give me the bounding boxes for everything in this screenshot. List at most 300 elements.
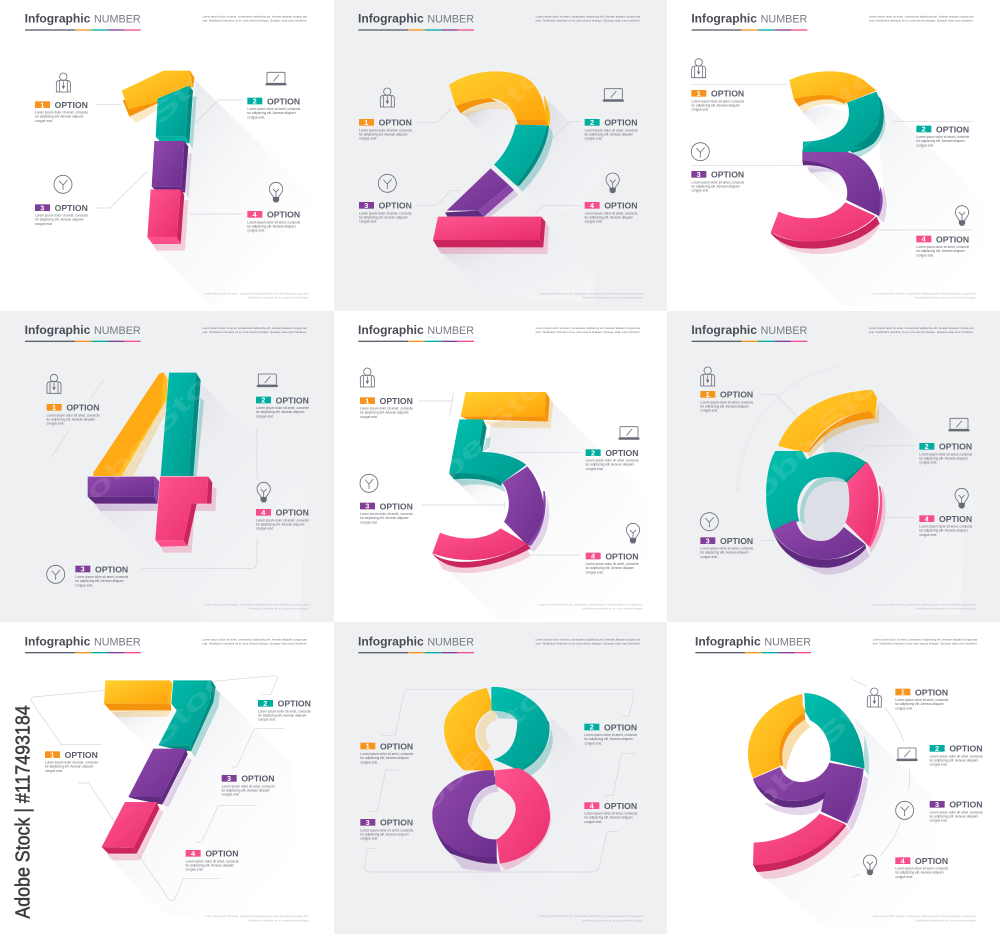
digit 3 [771, 71, 887, 254]
header description [202, 15, 307, 23]
option 4: OPTION [267, 210, 300, 220]
panel: number 1 [0, 0, 334, 311]
header: title [25, 12, 141, 31]
header: title: NUMBER [764, 636, 811, 648]
option 2: 2 [922, 125, 926, 134]
footer text [539, 291, 643, 300]
footer text [539, 602, 643, 611]
watermark: Adobe Stock [370, 22, 586, 238]
option 1: OPTION [720, 390, 753, 400]
header description: erat. Vestibulum interdum mi eu urna viverra tristique. Quisque vitae nunc hendrerit. [536, 330, 641, 334]
option 2: OPTION [605, 448, 639, 458]
option 4: Lorem ipsum dolor sit amet, consecte [186, 859, 239, 863]
option 3: tur adipiscing elit. Aenean aliquam [700, 551, 749, 555]
option 3 [700, 536, 754, 559]
option 4: tur adipiscing elit. Aenean aliquam [584, 816, 633, 820]
option 1: 1 [52, 403, 56, 412]
footer text [539, 914, 643, 922]
option 3: OPTION [95, 564, 128, 574]
option 2: tur adipiscing elit. Aenean aliquam [584, 737, 633, 741]
long shadow of 9 [760, 717, 934, 929]
option 2: Lorem ipsum dolor sit amet, consecte [919, 452, 973, 456]
option 4: congue erat. [895, 875, 913, 879]
leader lines [760, 394, 914, 540]
option 1: tur adipiscing elit. Aenean aliquam [35, 115, 84, 119]
option 1 [895, 687, 949, 710]
option 4: tur adipiscing elit. Aenean aliquam [919, 529, 968, 533]
icon: bulb [626, 523, 640, 543]
header: title: Infographic [358, 634, 424, 648]
icon: clock [700, 513, 718, 531]
option 2 [247, 96, 301, 119]
option 2: OPTION [278, 699, 311, 709]
option 1: Lorem ipsum dolor sit amet, consecte [35, 111, 88, 115]
option 4: congue erat. [584, 820, 602, 824]
header: title: NUMBER [94, 14, 141, 26]
header description: Lorem ipsum dolor sit amet, consectetur adipiscing elit. Aenean aliquam congue par [536, 326, 640, 330]
option 4: 4 [253, 210, 258, 219]
option 3 [691, 170, 745, 193]
footer text [205, 291, 309, 300]
option 4: 4 [261, 508, 266, 517]
long shadow of 1 [152, 80, 317, 308]
footer text: Lorem ipsum dolor sit amet, consectetur adipiscing elit. Aenean aliquam congue erat [539, 602, 643, 606]
option 3: tur adipiscing elit. Aenean aliquam [35, 218, 84, 222]
icon: clock [360, 474, 378, 492]
option 4: 4 [901, 856, 906, 865]
option 3: congue erat. [222, 793, 239, 797]
digit 6 [766, 390, 886, 575]
option 1: OPTION [711, 89, 744, 99]
option 1: 1 [364, 118, 368, 127]
icon: clock [54, 175, 72, 193]
option 1: tur adipiscing elit. Aenean aliquam [700, 404, 749, 408]
footer text: Lorem ipsum dolor sit amet, consectetur adipiscing elit. Aenean aliquam congue erat [205, 602, 309, 606]
option 4: 4 [590, 201, 595, 210]
icon: laptop [266, 72, 286, 85]
leader lines [419, 393, 581, 555]
option 1 [35, 100, 88, 123]
option 3: congue erat. [700, 555, 718, 559]
header description: erat. Vestibulum interdum mi eu urna viverra tristique. Quisque vitae nunc hendrerit. [869, 19, 974, 23]
option 2: 2 [253, 97, 257, 106]
option 1: congue erat. [691, 108, 709, 112]
option 3: congue erat. [691, 189, 709, 193]
option 3: OPTION [380, 818, 413, 828]
icon: bulb [269, 182, 283, 202]
stock id vertical text: Adobe Stock | #117493184 [12, 705, 35, 919]
option 1: congue erat. [45, 769, 63, 773]
header description [202, 326, 307, 334]
option 4 [919, 514, 973, 537]
option 3: 3 [366, 818, 370, 827]
option 4: congue erat. [585, 220, 602, 224]
header: title: Infographic [691, 12, 757, 26]
icon: person [692, 59, 706, 78]
option 3: Lorem ipsum dolor sit amet, consecte [700, 547, 754, 551]
option 3: OPTION [379, 201, 412, 211]
option 3: tur adipiscing elit. Aenean aliquam [75, 579, 124, 583]
option 1: tur adipiscing elit. Aenean aliquam [359, 132, 408, 136]
icon: person [867, 688, 881, 707]
panel: number 5 [334, 311, 667, 622]
option 1: OPTION [380, 741, 413, 751]
option 4: 4 [191, 849, 196, 858]
option 3: congue erat. [930, 819, 947, 823]
option 3: tur adipiscing elit. Aenean aliquam [360, 516, 409, 520]
option 2 [584, 722, 638, 745]
option 2: congue erat. [586, 467, 603, 471]
option 1: OPTION [55, 100, 88, 110]
option 4 [584, 801, 638, 824]
footer text: Vestibulum interdum mi eu urna viverra tristique [248, 918, 309, 922]
option 4: tur adipiscing elit. Aenean aliquam [585, 215, 633, 219]
header description [873, 637, 978, 645]
header: title [695, 634, 811, 653]
icon: clock [378, 174, 396, 192]
option 4: Lorem ipsum dolor sit amet, consecte [586, 562, 639, 566]
option 2: OPTION [949, 744, 983, 754]
option 2: 2 [935, 744, 939, 753]
option 2: Lorem ipsum dolor sit amet, consecte [258, 709, 311, 713]
option 4: 4 [591, 552, 596, 561]
panel: number 3 [667, 0, 1000, 311]
option 1: Lorem ipsum dolor sit amet, consecte [359, 128, 412, 132]
option 2: tur adipiscing elit. Aenean aliquam [916, 139, 965, 143]
option 3: congue erat. [360, 520, 378, 524]
option 4 [247, 210, 301, 233]
header: title: NUMBER [427, 636, 474, 648]
leader lines [51, 379, 257, 569]
option 4 [585, 201, 638, 224]
option 2: OPTION [604, 118, 638, 128]
option 1: Lorem ipsum dolor sit amet, consecte [47, 413, 100, 417]
option 2: OPTION [604, 722, 637, 732]
header: title: Infographic [358, 323, 424, 337]
header description: erat. Vestibulum interdum mi eu urna viverra tristique. Quisque vitae nunc hendrerit. [869, 330, 974, 334]
footer text: Lorem ipsum dolor sit amet, consectetur adipiscing elit. Aenean aliquam congue erat [539, 914, 643, 918]
option 1: congue erat. [895, 706, 913, 710]
option 1: Lorem ipsum dolor sit amet, consecte [700, 400, 754, 404]
option 4: tur adipiscing elit. Aenean aliquam [895, 871, 944, 875]
option 1: Lorem ipsum dolor sit amet, consecte [360, 752, 414, 756]
option 1: tur adipiscing elit. Aenean aliquam [47, 417, 95, 421]
option 1: congue erat. [35, 119, 53, 123]
option 1: Lorem ipsum dolor sit amet, consecte [691, 99, 745, 103]
option 2: OPTION [276, 395, 309, 405]
digit 5 [432, 392, 553, 573]
leader lines [31, 676, 284, 901]
long shadow of 8 [451, 717, 644, 926]
option 1: OPTION [915, 687, 948, 697]
option 3: OPTION [380, 501, 413, 511]
option 4: OPTION [936, 234, 969, 244]
option 2: tur adipiscing elit. Aenean aliquam [919, 456, 968, 460]
option 2: Lorem ipsum dolor sit amet, consecte [584, 733, 638, 737]
icon: person [56, 73, 70, 92]
header: title: Infographic [358, 12, 424, 26]
option 1 [47, 403, 100, 426]
header: title [358, 323, 474, 342]
icon: laptop [603, 89, 624, 101]
option 2: 2 [590, 723, 594, 732]
option 4 [895, 856, 949, 879]
option 2: 2 [591, 448, 595, 457]
option 1: Lorem ipsum dolor sit amet, consecte [360, 407, 413, 411]
option 4: tur adipiscing elit. Aenean aliquam [256, 522, 305, 526]
option 3: OPTION [241, 774, 275, 784]
panel: number 2 [334, 0, 667, 311]
icon: bulb [863, 855, 877, 875]
long shadow of 4 [93, 383, 307, 619]
icon: person [360, 368, 374, 387]
panel: number 4 [0, 311, 334, 622]
header: title: Infographic [25, 323, 91, 337]
footer text: Vestibulum interdum mi eu urna viverra tristique [248, 296, 309, 300]
header description: erat. Vestibulum interdum mi eu urna viverra tristique. Quisque vitae nunc hendrerit. [536, 19, 641, 23]
icon: laptop [257, 374, 278, 387]
header: title [358, 634, 474, 653]
option 2: tur adipiscing elit. Aenean aliquam [930, 758, 978, 762]
option 3: Lorem ipsum dolor sit amet, consecte [222, 784, 275, 788]
option 3: Lorem ipsum dolor sit amet, consecte [360, 828, 414, 832]
footer text: Lorem ipsum dolor sit amet, consectetur adipiscing elit. Aenean aliquam congue erat [205, 914, 309, 918]
option 3: 3 [227, 774, 231, 783]
option 3: Lorem ipsum dolor sit amet, consecte [75, 575, 129, 579]
footer text: Lorem ipsum dolor sit amet, consectetur adipiscing elit. Aenean aliquam congue erat [872, 602, 976, 606]
option 3 [359, 201, 412, 224]
option 3: congue erat. [359, 220, 377, 224]
option 3 [75, 564, 129, 587]
long shadow of 3 [779, 98, 984, 307]
footer text: Vestibulum interdum mi eu urna viverra tristique [582, 918, 643, 922]
option 1: tur adipiscing elit. Aenean aliquam [360, 411, 409, 415]
option 1: 1 [706, 390, 710, 399]
option 2: congue erat. [584, 741, 602, 745]
option 2: 2 [925, 442, 929, 451]
option 4: tur adipiscing elit. Aenean aliquam [916, 249, 965, 253]
icon: laptop [619, 427, 639, 439]
option 1 [360, 741, 414, 764]
option 2: tur adipiscing elit. Aenean aliquam [258, 713, 307, 717]
option 2: tur adipiscing elit. Aenean aliquam [247, 111, 296, 115]
watermark: Adobe Stock [703, 22, 919, 238]
option 4: OPTION [939, 514, 972, 524]
option 3: Lorem ipsum dolor sit amet, consecte [691, 180, 745, 184]
option 4 [586, 551, 639, 574]
header description: erat. Vestibulum interdum mi eu urna viverra tristique. Quisque vitae nunc hendrerit. [873, 641, 978, 645]
watermark: Adobe Stock [36, 644, 252, 860]
header description: Lorem ipsum dolor sit amet, consectetur adipiscing elit. Aenean aliquam congue par [202, 637, 307, 641]
header: title [358, 12, 474, 31]
option 2 [258, 699, 311, 722]
option 4: Lorem ipsum dolor sit amet, consecte [895, 867, 949, 871]
header description [536, 326, 641, 334]
option 4: congue erat. [256, 527, 274, 531]
option 1: OPTION [380, 396, 413, 406]
option 3: Lorem ipsum dolor sit amet, consecte [35, 214, 88, 218]
option 1: OPTION [65, 750, 98, 760]
option 1 [700, 390, 754, 413]
icon: bulb [955, 488, 968, 508]
option 3: tur adipiscing elit. Aenean aliquam [930, 814, 978, 818]
digit 2 [433, 71, 553, 254]
option 4: OPTION [276, 508, 309, 518]
option 2: 2 [261, 396, 265, 405]
option 3: congue erat. [360, 837, 378, 841]
header description: erat. Vestibulum interdum mi eu urna viverra tristique. Quisque vitae nunc hendrerit. [202, 330, 307, 334]
option 2 [585, 118, 638, 141]
option 2: Lorem ipsum dolor sit amet, consecte [586, 459, 639, 463]
watermark: Adobe Stock [370, 333, 586, 549]
header: title: NUMBER [427, 325, 474, 337]
option 4: Lorem ipsum dolor sit amet, consecte [919, 525, 973, 529]
option 1: 1 [40, 100, 44, 109]
option 4 [256, 508, 309, 531]
leader lines [96, 100, 243, 214]
option 4: tur adipiscing elit. Aenean aliquam [186, 863, 234, 867]
option 1 [691, 89, 745, 112]
option 1: congue erat. [360, 760, 378, 764]
header description: Lorem ipsum dolor sit amet, consectetur adipiscing elit. Aenean aliquam congue par [869, 326, 974, 330]
footer text [872, 291, 976, 300]
footer text: Vestibulum interdum mi eu urna viverra tristique [915, 607, 976, 611]
option 1: tur adipiscing elit. Aenean aliquam [360, 756, 409, 760]
footer text [872, 914, 976, 922]
header: title: NUMBER [761, 14, 807, 26]
header description: erat. Vestibulum interdum mi eu urna viverra tristique. Quisque vitae nunc hendrerit. [202, 641, 307, 645]
header description: Lorem ipsum dolor sit amet, consectetur adipiscing elit. Aenean aliquam congue par [536, 15, 640, 19]
option 2 [916, 124, 970, 147]
panel: number 7 [0, 622, 334, 934]
option 4: OPTION [205, 849, 239, 859]
header description: Lorem ipsum dolor sit amet, consectetur adipiscing elit. Aenean aliquam congue par [873, 637, 977, 641]
icon: clock [896, 801, 914, 819]
option 3: OPTION [711, 170, 744, 180]
option 2 [919, 442, 973, 465]
option 1: congue erat. [700, 409, 718, 413]
header description: erat. Vestibulum interdum mi eu urna viverra tristique. Quisque vitae nunc hendrerit. [202, 19, 307, 23]
option 1: 1 [697, 89, 701, 98]
option 3: OPTION [949, 800, 983, 810]
option 1 [359, 118, 412, 141]
option 3: Lorem ipsum dolor sit amet, consecte [360, 512, 413, 516]
option 1: 1 [366, 742, 370, 751]
footer text: Lorem ipsum dolor sit amet, consectetur adipiscing elit. Aenean aliquam congue erat [539, 291, 643, 295]
icon: person [380, 88, 394, 107]
option 3: OPTION [55, 203, 88, 213]
option 2: 2 [263, 699, 267, 708]
option 3: congue erat. [35, 222, 53, 226]
icon: person [701, 367, 715, 386]
header description [869, 15, 974, 23]
digit 1 [122, 71, 197, 251]
option 1: tur adipiscing elit. Aenean aliquam [45, 765, 94, 769]
icon: clock [691, 143, 709, 161]
long shadow of 7 [107, 689, 293, 915]
option 2: congue erat. [258, 718, 276, 722]
footer text: Vestibulum interdum mi eu urna viverra tristique [582, 296, 643, 300]
option 1: 1 [365, 396, 369, 405]
option 4: congue erat. [247, 229, 265, 233]
option 2: Lorem ipsum dolor sit amet, consecte [256, 406, 309, 410]
option 3: 3 [81, 565, 85, 574]
icon: bulb [257, 482, 270, 502]
header description [869, 326, 974, 334]
option 3: tur adipiscing elit. Aenean aliquam [691, 184, 740, 188]
footer text [872, 602, 976, 611]
footer text: Lorem ipsum dolor sit amet, consectetur adipiscing elit. Aenean aliquam congue erat [872, 914, 976, 918]
long shadow of 6 [800, 401, 984, 614]
option 3: Lorem ipsum dolor sit amet, consecte [930, 810, 983, 814]
header: title [691, 323, 807, 342]
option 4: OPTION [915, 856, 948, 866]
option 4: OPTION [605, 551, 639, 561]
dotted arc [738, 367, 838, 491]
option 1: 1 [901, 688, 905, 697]
option 1: Lorem ipsum dolor sit amet, consecte [895, 698, 949, 702]
option 1 [360, 396, 413, 419]
icon: laptop [897, 748, 917, 761]
option 3: tur adipiscing elit. Aenean aliquam [222, 788, 270, 792]
option 2: OPTION [936, 124, 969, 134]
header description [536, 15, 641, 23]
header: title [691, 12, 807, 31]
option 4: tur adipiscing elit. Aenean aliquam [247, 224, 296, 228]
watermark: Adobe Stock [36, 333, 252, 549]
header description: Lorem ipsum dolor sit amet, consectetur adipiscing elit. Aenean aliquam congue par [202, 326, 307, 330]
option 3 [222, 774, 275, 797]
option 2: tur adipiscing elit. Aenean aliquam [256, 410, 305, 414]
option 4: congue erat. [919, 533, 937, 537]
option 4: Lorem ipsum dolor sit amet, consecte [247, 220, 301, 224]
option 2: tur adipiscing elit. Aenean aliquam [585, 132, 633, 136]
header description [202, 637, 307, 645]
option 4: congue erat. [586, 570, 603, 574]
option 3: congue erat. [75, 583, 93, 587]
watermark: Adobe Stock [703, 333, 919, 549]
watermark: Adobe Stock [703, 644, 919, 860]
option 4: 4 [925, 514, 930, 523]
option 2: Lorem ipsum dolor sit amet, consecte [930, 754, 983, 758]
option 3: tur adipiscing elit. Aenean aliquam [359, 215, 408, 219]
hole of the six [800, 476, 850, 541]
digit 7 [102, 680, 220, 860]
option 1: congue erat. [359, 137, 377, 141]
option 1: congue erat. [47, 422, 65, 426]
option 2: congue erat. [256, 414, 274, 418]
option 1 [45, 750, 98, 773]
header description: Lorem ipsum dolor sit amet, consectetur adipiscing elit. Aenean aliquam congue par [202, 15, 307, 19]
option 2: congue erat. [247, 115, 265, 119]
option 1: tur adipiscing elit. Aenean aliquam [691, 103, 740, 107]
header: title: NUMBER [94, 325, 141, 337]
watermark: Adobe Stock [36, 22, 252, 238]
option 2: OPTION [267, 96, 300, 106]
header: title: NUMBER [94, 636, 141, 648]
option 2: 2 [590, 118, 594, 127]
footer text: Vestibulum interdum mi eu urna viverra tristique [915, 296, 976, 300]
long shadow of 2 [437, 100, 617, 302]
footer text: Lorem ipsum dolor sit amet, consectetur adipiscing elit. Aenean aliquam congue erat [205, 291, 309, 295]
header: title: Infographic [695, 634, 761, 648]
option 2: congue erat. [916, 143, 934, 147]
footer text [205, 914, 309, 922]
option 4 [916, 234, 970, 257]
header: title: Infographic [691, 323, 757, 337]
icon: person [47, 374, 61, 393]
option 1: OPTION [379, 118, 412, 128]
